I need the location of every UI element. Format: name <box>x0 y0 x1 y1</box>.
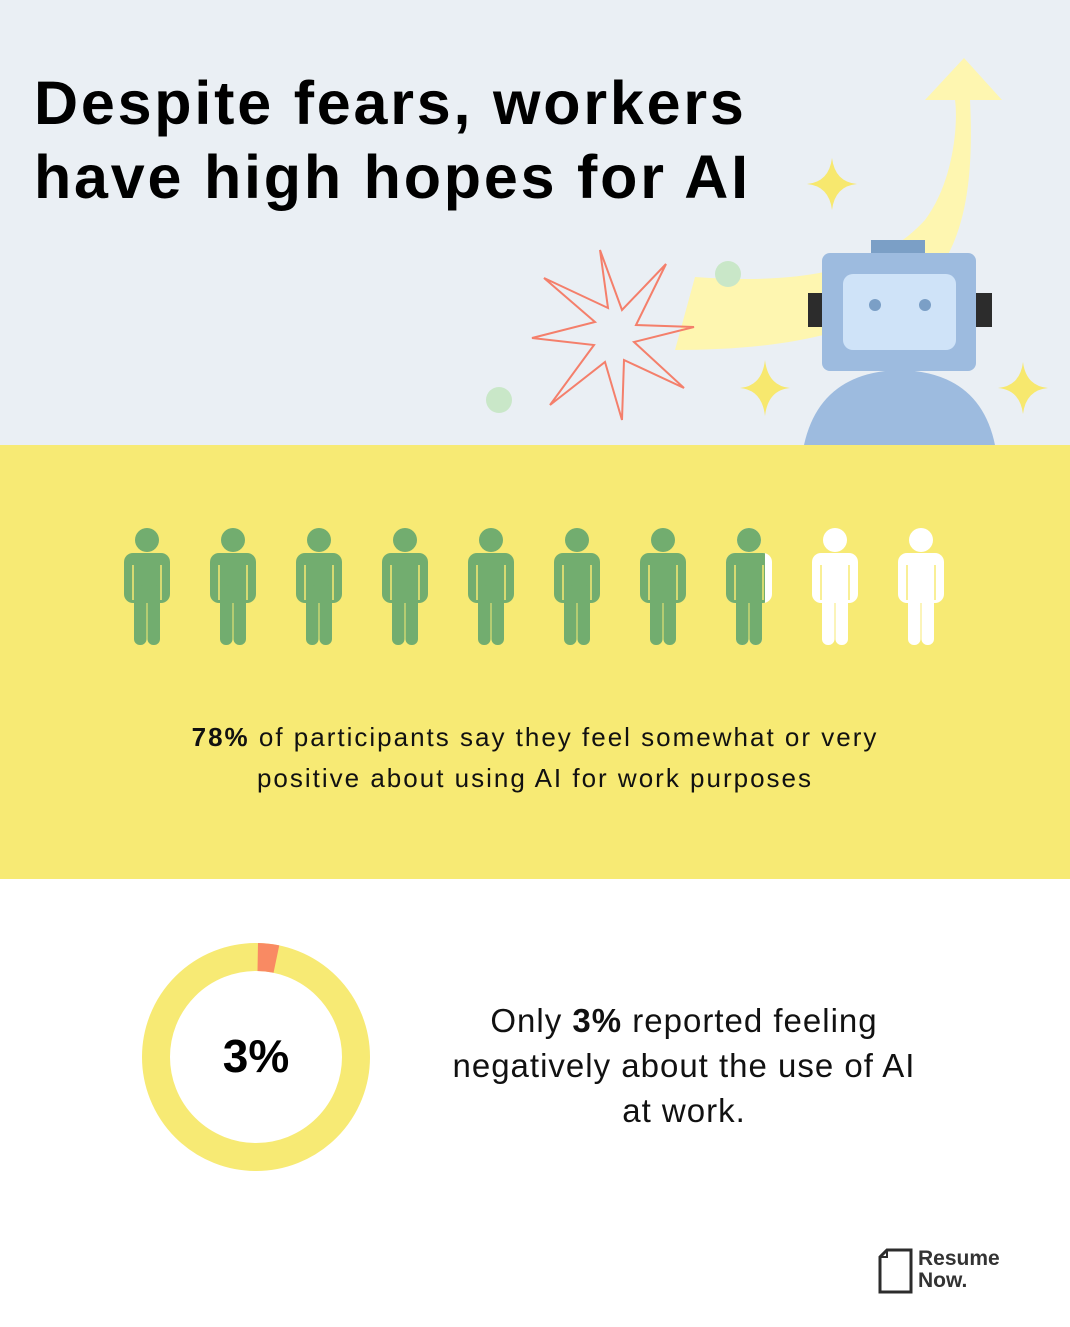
donut chart: 3% <box>223 1030 289 1082</box>
dots <box>486 261 741 413</box>
logo <box>878 1247 1000 1294</box>
robot <box>804 240 995 445</box>
title: Despite fears, workers <box>34 69 747 137</box>
illustration: robot with arrow <box>486 58 1048 445</box>
stat text: 78% of participants say they feel somewhat or very <box>192 722 878 752</box>
stat text <box>192 722 878 793</box>
pictogram row <box>124 528 944 645</box>
negative stat text <box>452 1002 915 1129</box>
stat text: positive about using AI for work purposes <box>257 763 813 793</box>
header panel <box>0 0 1070 445</box>
logo: Resume <box>918 1247 1000 1270</box>
negative stat text: negatively about the use of AI <box>452 1047 915 1084</box>
donut chart <box>142 943 370 1171</box>
sparkles <box>740 158 1048 416</box>
negative stat text: at work. <box>622 1092 746 1129</box>
panel: 78% positive <box>0 445 1070 879</box>
title: have high hopes for AI <box>34 143 751 211</box>
starburst <box>532 250 694 420</box>
logo: Now. <box>918 1269 967 1292</box>
title <box>34 69 751 211</box>
arrow <box>675 58 1002 350</box>
negative stat text: Only 3% reported feeling <box>490 1002 878 1039</box>
